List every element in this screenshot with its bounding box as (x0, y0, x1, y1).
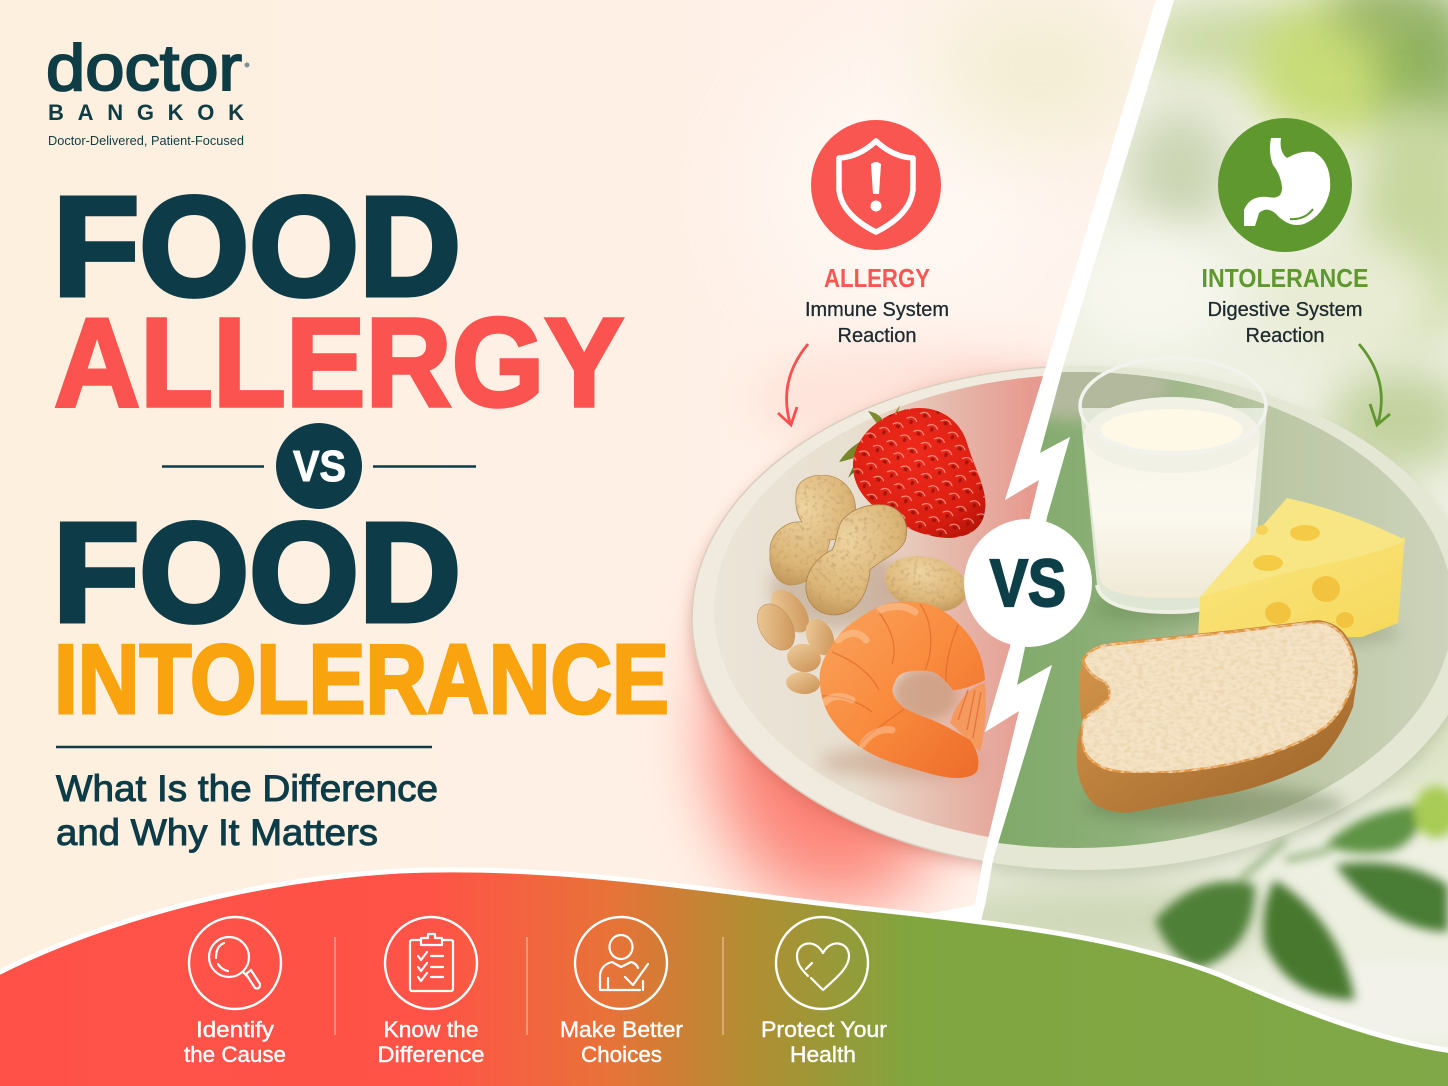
label: intolerance (1202, 263, 1368, 347)
benefit: know the difference: Know the (384, 1017, 478, 1042)
bottom band: wave (0, 870, 1448, 1086)
label: intolerance: Digestive System (1208, 298, 1362, 321)
benefit: identify the cause (184, 917, 286, 1067)
benefit: protect your health: Health (790, 1042, 856, 1067)
peanut: back (770, 475, 856, 585)
subtitle: and Why It Matters (56, 812, 378, 853)
title: Food Allergy vs Food Intolerance: INTOLERANCE (54, 624, 669, 734)
subtitle: What Is the Difference (56, 768, 438, 809)
benefit: make better choices (560, 917, 683, 1067)
food: strawberry (839, 405, 985, 538)
VS separator with lines (162, 423, 476, 509)
panel: allergy background (0, 0, 1156, 969)
logo: doctor Bangkok: BANGKOK (48, 100, 244, 125)
logo: doctor Bangkok: doctor (46, 31, 242, 104)
divider: white lightning split (975, 0, 1174, 905)
VS badge: centre of plates: VS (990, 546, 1066, 621)
benefit: make better choices: Make Better (560, 1017, 683, 1042)
icon: clipboard (410, 934, 453, 991)
blurred foliage (982, 0, 1448, 1053)
peanut: right (884, 556, 966, 612)
label: allergy: Reaction (838, 324, 916, 347)
title: Food Allergy vs Food Intolerance: ALLERGY (54, 292, 624, 433)
food: peanut kernels (757, 590, 834, 694)
logo: doctor Bangkok: Doctor-Delivered, Patient-Focused (48, 134, 244, 148)
label: allergy (805, 263, 949, 347)
label: allergy: Immune System (805, 298, 949, 321)
arrow: intolerance (1359, 344, 1390, 425)
icon: heart (797, 943, 849, 990)
icon: allergy shield (811, 120, 941, 250)
icon: stomach (1218, 118, 1352, 252)
benefit: protect your health (761, 917, 887, 1067)
VS separator with lines: VS (293, 442, 346, 491)
allergy plate (683, 366, 1046, 874)
icon: person with check (600, 935, 648, 990)
benefit: make better choices: Choices (581, 1042, 662, 1067)
intolerance plate (990, 366, 1448, 882)
benefit: protect your health: Protect Your (761, 1017, 887, 1042)
benefit: know the difference (378, 917, 484, 1067)
food: shrimp (820, 602, 986, 778)
benefit: identify the cause: the Cause (184, 1042, 286, 1067)
peanut: front (806, 505, 907, 615)
arrow: allergy (778, 344, 808, 425)
subtitle (56, 768, 438, 853)
blurred leaves (1155, 786, 1448, 1000)
rule under title (56, 746, 432, 748)
label: intolerance: INTOLERANCE (1202, 263, 1368, 293)
title: Food Allergy vs Food Intolerance: FOOD (53, 493, 461, 651)
food: slice of bread (1077, 620, 1358, 825)
food: cheese wedge (1198, 498, 1405, 644)
benefit: identify the cause: Identify (196, 1017, 274, 1042)
title: Food Allergy vs Food Intolerance (53, 167, 669, 734)
food: glass of milk (1080, 358, 1267, 623)
panel: intolerance background (982, 0, 1448, 1048)
title: Food Allergy vs Food Intolerance: FOOD (53, 167, 461, 325)
icon: magnifier (209, 937, 260, 988)
logo: doctor Bangkok (46, 31, 250, 148)
benefit: know the difference: Difference (378, 1042, 484, 1067)
dividers between benefits (335, 937, 723, 1035)
label: allergy: ALLERGY (824, 263, 930, 293)
label: intolerance: Reaction (1246, 324, 1324, 347)
VS badge: centre of plates (964, 519, 1092, 647)
food: peanuts (770, 475, 973, 630)
